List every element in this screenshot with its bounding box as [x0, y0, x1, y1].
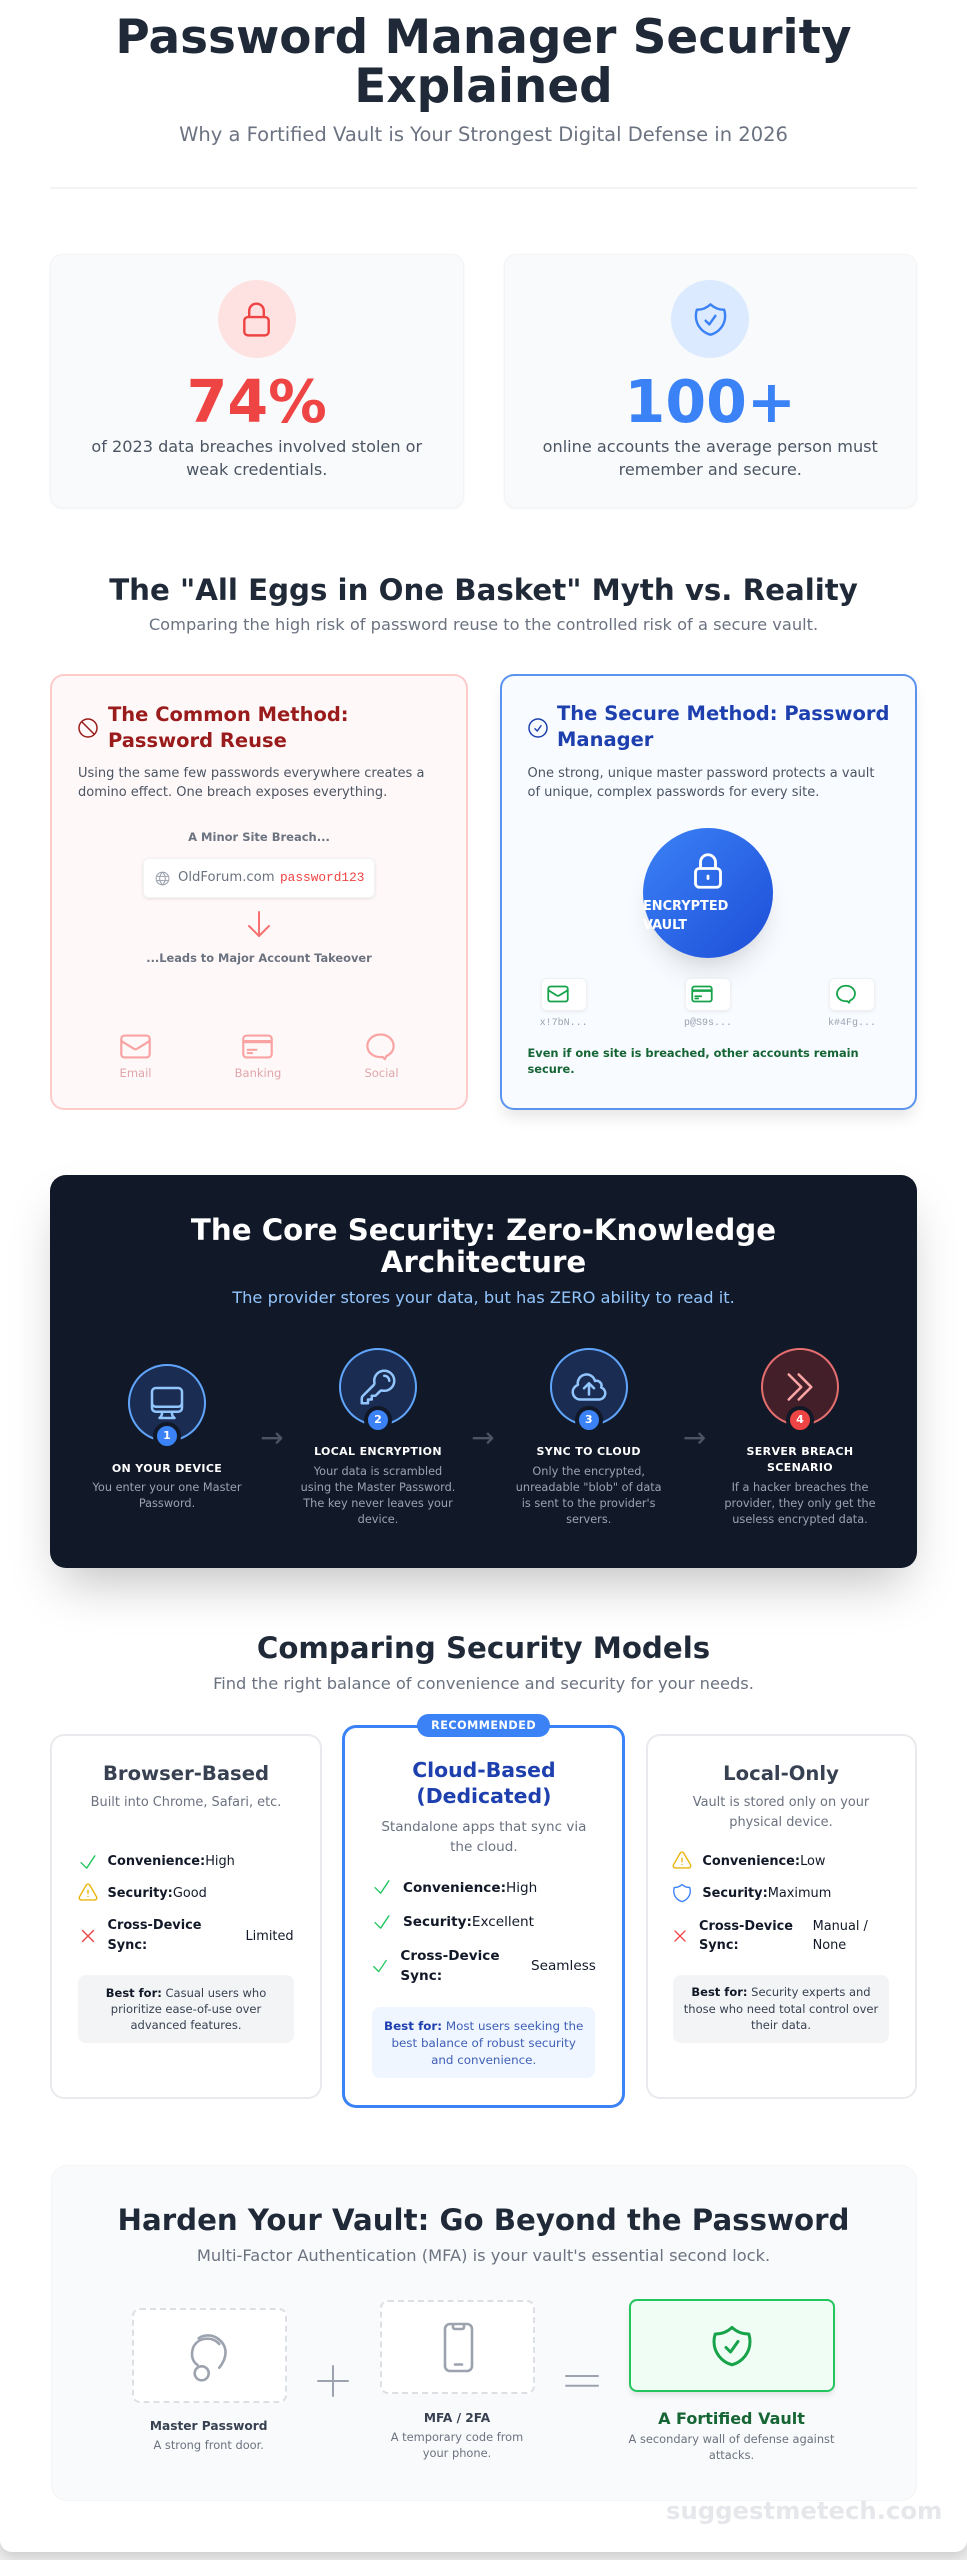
box: fortified vault: [629, 2299, 835, 2392]
card subtitle: the cloud.: [450, 1838, 518, 1854]
stat description: remember and secure.: [619, 460, 802, 479]
card subtitle: [381, 1818, 586, 1854]
label: takeover: ...Leads to Major Account Takeover: [146, 950, 372, 964]
card title: Browser-Based: [103, 1762, 269, 1785]
stat description: [543, 437, 878, 479]
sync label: [699, 1917, 793, 1955]
step 1 title: ON YOUR DEVICE: [112, 1462, 222, 1475]
description: mfa: your phone.: [423, 2446, 491, 2460]
watermark: suggestmetech.com: [666, 2496, 942, 2525]
icon: email: [120, 1034, 151, 1058]
recommended badge: [417, 1714, 550, 1737]
stat description: of 2023 data breaches involved stolen or: [91, 437, 422, 456]
panel: browser-based: [50, 1734, 322, 2099]
best for text: Best for: Casual users who: [106, 1986, 266, 2000]
panel subtitle: The provider stores your data, but has ZERO ability to read it.: [232, 1288, 735, 1306]
step 1 description: You enter your one Master: [93, 1481, 241, 1494]
stat description: online accounts the average person must: [543, 437, 878, 456]
panel: common method: [50, 674, 468, 1110]
vault label: [643, 899, 728, 933]
step 4 description: useless encrypted data.: [732, 1513, 868, 1526]
subheading: comparing models: Find the right balance of convenience and security for your needs.: [213, 1674, 754, 1692]
card title: Local-Only: [723, 1762, 839, 1785]
icon: vault lock: [694, 853, 722, 889]
icon: warning: [78, 1883, 98, 1901]
panel heading: Password Reuse: [108, 729, 287, 752]
description: fortified vault: attacks.: [709, 2448, 754, 2462]
security row: Security:Excellent: [403, 1914, 534, 1930]
icon: check: [374, 1880, 390, 1894]
panel description: Using the same few passwords everywhere creates a: [78, 766, 424, 781]
sync value: [813, 1917, 868, 1955]
panel: cloud-based: [342, 1725, 625, 2108]
best for box: [372, 2007, 595, 2078]
arrow 1: →: [260, 1421, 284, 1454]
equals: [566, 2374, 598, 2388]
recommended badge: RECOMMENDED: [431, 1719, 536, 1732]
code: social: k#4Fg...: [828, 1018, 876, 1028]
label: mfa: MFA / 2FA: [424, 2410, 490, 2424]
badge 3: [575, 1406, 603, 1434]
best for text: Best for: Security experts and: [691, 1985, 871, 1999]
step 4 description: provider, they only get the: [724, 1497, 876, 1510]
label: minor breach: A Minor Site Breach...: [188, 830, 330, 844]
panel heading: Manager: [557, 728, 653, 751]
description: mfa: [391, 2428, 523, 2460]
icon: check: [373, 1960, 387, 1972]
step 1 description: [92, 1481, 242, 1510]
description: mfa: A temporary code from: [391, 2430, 523, 2444]
step 2 title: LOCAL ENCRYPTION: [314, 1445, 442, 1458]
sync value: None: [813, 1938, 846, 1953]
sync value: Limited: [246, 1928, 294, 1944]
sync label: Sync:: [699, 1938, 739, 1953]
step 4 title: SCENARIO: [767, 1461, 833, 1474]
step 2 description: The key never leaves your: [303, 1497, 453, 1510]
panel description: [528, 766, 874, 800]
description: master password: A strong front door.: [153, 2438, 264, 2452]
best for box: [673, 1975, 889, 2043]
site tile: email: [541, 978, 587, 1011]
vault circle: [643, 828, 773, 958]
panel description: domino effect. One breach exposes everything.: [78, 785, 387, 800]
stat description: weak credentials.: [186, 460, 327, 479]
step 4 description: [724, 1481, 876, 1526]
step 3 description: [516, 1465, 662, 1526]
box: master password: [132, 2308, 287, 2403]
label: master password: Master Password: [150, 2418, 268, 2432]
card subtitle: Vault is stored only on your: [693, 1795, 869, 1810]
best for text: [684, 1984, 878, 2033]
panel heading: The Common Method:: [108, 703, 349, 726]
plus: [318, 2366, 348, 2396]
panel heading: [557, 702, 889, 751]
vault label: VAULT: [643, 918, 687, 933]
icon: x: [82, 1930, 94, 1942]
sync label: Cross-Device: [108, 1918, 202, 1933]
label: fortified vault: A Fortified Vault: [658, 2408, 805, 2428]
best for text: advanced features.: [130, 2018, 242, 2032]
panel: zero knowledge: [50, 1175, 917, 1568]
subtitle: Why a Fortified Vault is Your Strongest Digital Defense in 2026: [179, 123, 788, 146]
panel: harden your vault: [50, 2165, 916, 2501]
security row: Security:Good: [108, 1886, 207, 1901]
step 2 description: using the Master Password.: [301, 1481, 455, 1494]
reassurance text: [528, 1046, 859, 1076]
stat number: 74%: [187, 368, 327, 436]
step 1 description: Password.: [139, 1497, 195, 1510]
card subtitle: physical device.: [729, 1814, 833, 1830]
panel heading: [108, 703, 349, 752]
stat number: 100+: [625, 368, 796, 436]
step 2 description: Your data is scrambled: [314, 1465, 442, 1478]
panel heading: The Secure Method: Password: [557, 702, 889, 725]
best for text: their data.: [751, 2018, 811, 2032]
panel title: [191, 1213, 776, 1279]
card title: (Dedicated): [416, 1784, 551, 1808]
description: fortified vault: A secondary wall of defense against: [629, 2432, 834, 2446]
heading: myth vs reality: The "All Eggs in One Basket" Myth vs. Reality: [109, 573, 858, 607]
badge 4: [786, 1406, 814, 1434]
icon: warning: [671, 1850, 693, 1872]
icon: shield: [671, 1882, 693, 1904]
card subtitle: [692, 1795, 870, 1830]
security row: Security:Maximum: [702, 1886, 831, 1901]
step 3 description: is sent to the provider's: [522, 1497, 656, 1510]
site tile: banking: [685, 978, 731, 1011]
best for text: [106, 1986, 266, 2032]
card subtitle: Built into Chrome, Safari, etc.: [91, 1795, 281, 1810]
arrow: down: [248, 911, 270, 937]
arrow 2: →: [471, 1421, 495, 1454]
icon: lock: [218, 280, 296, 358]
icon: check: [80, 1855, 96, 1869]
step 4 title: [747, 1445, 853, 1474]
sync label: Sync:: [400, 1968, 442, 1984]
step 3 description: servers.: [566, 1513, 611, 1526]
sync label: [400, 1948, 500, 1984]
best for text: best balance of robust security: [391, 2036, 576, 2050]
label: email: Email: [120, 1066, 151, 1080]
step 1 icon: [128, 1364, 206, 1442]
convenience row: Convenience:Low: [702, 1854, 825, 1869]
card subtitle: Standalone apps that sync via: [381, 1818, 586, 1834]
step 4 description: If a hacker breaches the: [732, 1481, 868, 1494]
title: [115, 10, 852, 114]
panel title: Architecture: [381, 1245, 586, 1279]
badge 4: 4: [796, 1413, 804, 1426]
panel: local-only: [646, 1734, 917, 2099]
password: password123: [280, 870, 364, 885]
step 4 title: SERVER BREACH: [747, 1445, 853, 1458]
panel description: [78, 766, 424, 800]
title: Explained: [354, 59, 613, 114]
badge 1: [153, 1422, 181, 1450]
sync value: Seamless: [531, 1958, 596, 1974]
code: email: x!7bN...: [540, 1018, 588, 1028]
step 2 description: [301, 1465, 455, 1526]
sync label: Cross-Device: [699, 1919, 793, 1934]
icon: master password: [191, 2334, 229, 2382]
badge 3: 3: [585, 1413, 593, 1426]
icon: globe: [156, 872, 170, 886]
title: Password Manager Security: [115, 10, 852, 65]
icon: no symbol: [78, 718, 98, 738]
card title: Cloud-Based: [412, 1758, 556, 1782]
best for text: prioritize ease-of-use over: [111, 2002, 261, 2016]
subheading: myth vs reality: Comparing the high risk of password reuse to the controlled risk of a secure vault.: [149, 614, 818, 634]
badge 2: 2: [374, 1413, 382, 1426]
panel subtitle: Multi-Factor Authentication (MFA) is your vault's essential second lock.: [197, 2246, 770, 2264]
reassurance text: Even if one site is breached, other accounts remain: [528, 1046, 859, 1060]
step 2 icon: [339, 1348, 417, 1426]
heading: comparing models: Comparing Security Models: [257, 1631, 710, 1665]
icon: x: [670, 1926, 690, 1946]
sync label: [108, 1918, 202, 1953]
icon: banking: [242, 1034, 273, 1058]
code: banking: p@S9s...: [684, 1018, 732, 1028]
badge 1: 1: [163, 1429, 171, 1442]
convenience row: Convenience:High: [403, 1880, 537, 1896]
step 3 description: unreadable "blob" of data: [516, 1481, 662, 1494]
site name: OldForum.com: [178, 870, 275, 884]
icon: phone: [444, 2323, 472, 2372]
icon: shield check: [708, 2322, 756, 2370]
panel: stat 100+: [504, 254, 917, 508]
step 4 icon: [761, 1348, 839, 1426]
card title: [412, 1758, 556, 1808]
description: fortified vault: [629, 2430, 834, 2462]
best for text: Best for: Most users seeking the: [384, 2019, 583, 2033]
icon: check: [374, 1915, 390, 1929]
label: banking: Banking: [235, 1066, 281, 1080]
stat description: [91, 437, 422, 479]
panel: secure method: [500, 674, 917, 1110]
panel description: One strong, unique master password protects a vault: [528, 766, 874, 781]
sync value: Manual /: [813, 1919, 868, 1934]
step 3 description: Only the encrypted,: [532, 1465, 645, 1478]
best for text: [384, 2019, 583, 2067]
reassurance text: secure.: [528, 1062, 575, 1076]
icon: shield: [671, 280, 749, 358]
icon: check circle: [528, 718, 548, 738]
panel title: The Core Security: Zero-Knowledge: [191, 1213, 776, 1247]
panel title: Harden Your Vault: Go Beyond the Password: [118, 2203, 849, 2237]
step 3 icon: [550, 1348, 628, 1426]
step 2 description: device.: [358, 1513, 398, 1526]
vault label: ENCRYPTED: [643, 899, 728, 914]
best for box: [78, 1975, 294, 2043]
icon: social: [366, 1033, 395, 1060]
site credential box: [143, 858, 375, 898]
best for text: and convenience.: [431, 2053, 536, 2067]
panel description: of unique, complex passwords for every site.: [528, 785, 819, 800]
sync label: Sync:: [108, 1938, 147, 1953]
label: social: Social: [364, 1066, 399, 1080]
sync label: Cross-Device: [400, 1948, 500, 1964]
arrow 3: →: [683, 1421, 706, 1454]
panel: stat 74%: [50, 254, 464, 508]
site tile: social: [829, 978, 875, 1011]
step 3 title: SYNC TO CLOUD: [537, 1445, 641, 1458]
best for text: those who need total control over: [684, 2002, 878, 2016]
convenience row: Convenience:High: [108, 1854, 235, 1869]
box: mfa: [380, 2300, 535, 2394]
badge 2: [364, 1406, 392, 1434]
